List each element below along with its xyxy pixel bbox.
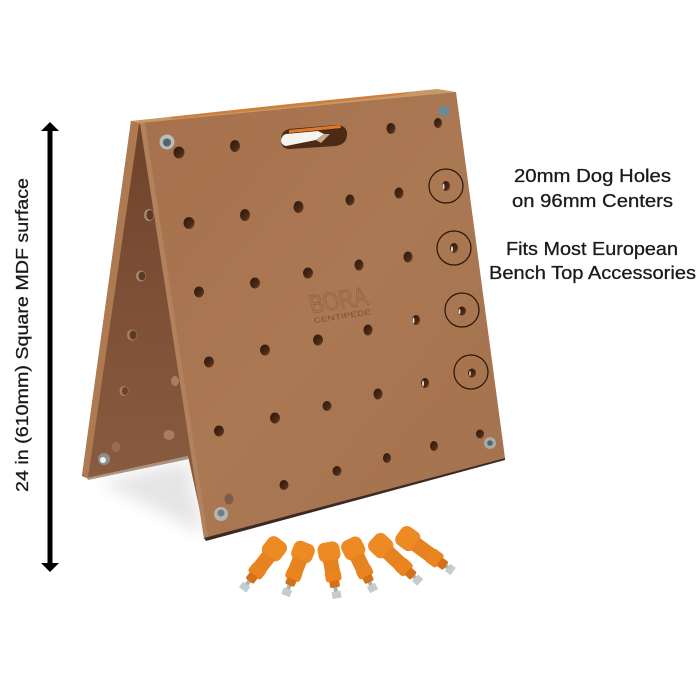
top edge of board, orange bbox=[131, 89, 456, 124]
logo: BORA Centipede: CENTIPEDE bbox=[313, 307, 372, 325]
screw: bottom right bbox=[484, 437, 496, 449]
dog holes bbox=[174, 118, 484, 504]
dimension arrow bbox=[41, 122, 59, 572]
panel: front MDF board bbox=[140, 92, 505, 541]
bench dog 2 bbox=[275, 539, 317, 600]
bench dog 6 bbox=[392, 523, 460, 580]
logo: BORA Centipede: BORA bbox=[306, 281, 371, 319]
screw: bottom left bbox=[214, 507, 228, 521]
callout text: accessories: Fits Most European bbox=[506, 238, 678, 259]
orange bench dogs bbox=[234, 523, 460, 600]
bench dog 4 bbox=[339, 534, 384, 596]
callout text: dog holes bbox=[512, 165, 673, 211]
handle slot bbox=[281, 125, 347, 149]
rear screw bbox=[98, 453, 110, 465]
screw: top left bbox=[160, 134, 174, 150]
callout text: accessories: Bench Top Accessories bbox=[489, 262, 696, 283]
bench dog 1 bbox=[234, 533, 290, 597]
screw: top right bbox=[438, 105, 450, 117]
dimension label: 24 in (610mm) Square MDF surface bbox=[12, 178, 32, 492]
circled holes callouts bbox=[429, 169, 488, 389]
callout text: dog holes: 20mm Dog Holes bbox=[514, 165, 671, 186]
bench dog 3 bbox=[316, 540, 348, 600]
rear holes bbox=[112, 209, 179, 452]
panel: rear MDF board bbox=[82, 121, 204, 530]
callout text: accessories bbox=[489, 238, 696, 283]
bench dog 5 bbox=[365, 530, 428, 591]
hole highlights bbox=[412, 184, 471, 386]
shadow under board bbox=[100, 460, 204, 534]
logo: BORA Centipede bbox=[306, 281, 373, 325]
callout text: dog holes: on 96mm Centers bbox=[512, 190, 673, 211]
